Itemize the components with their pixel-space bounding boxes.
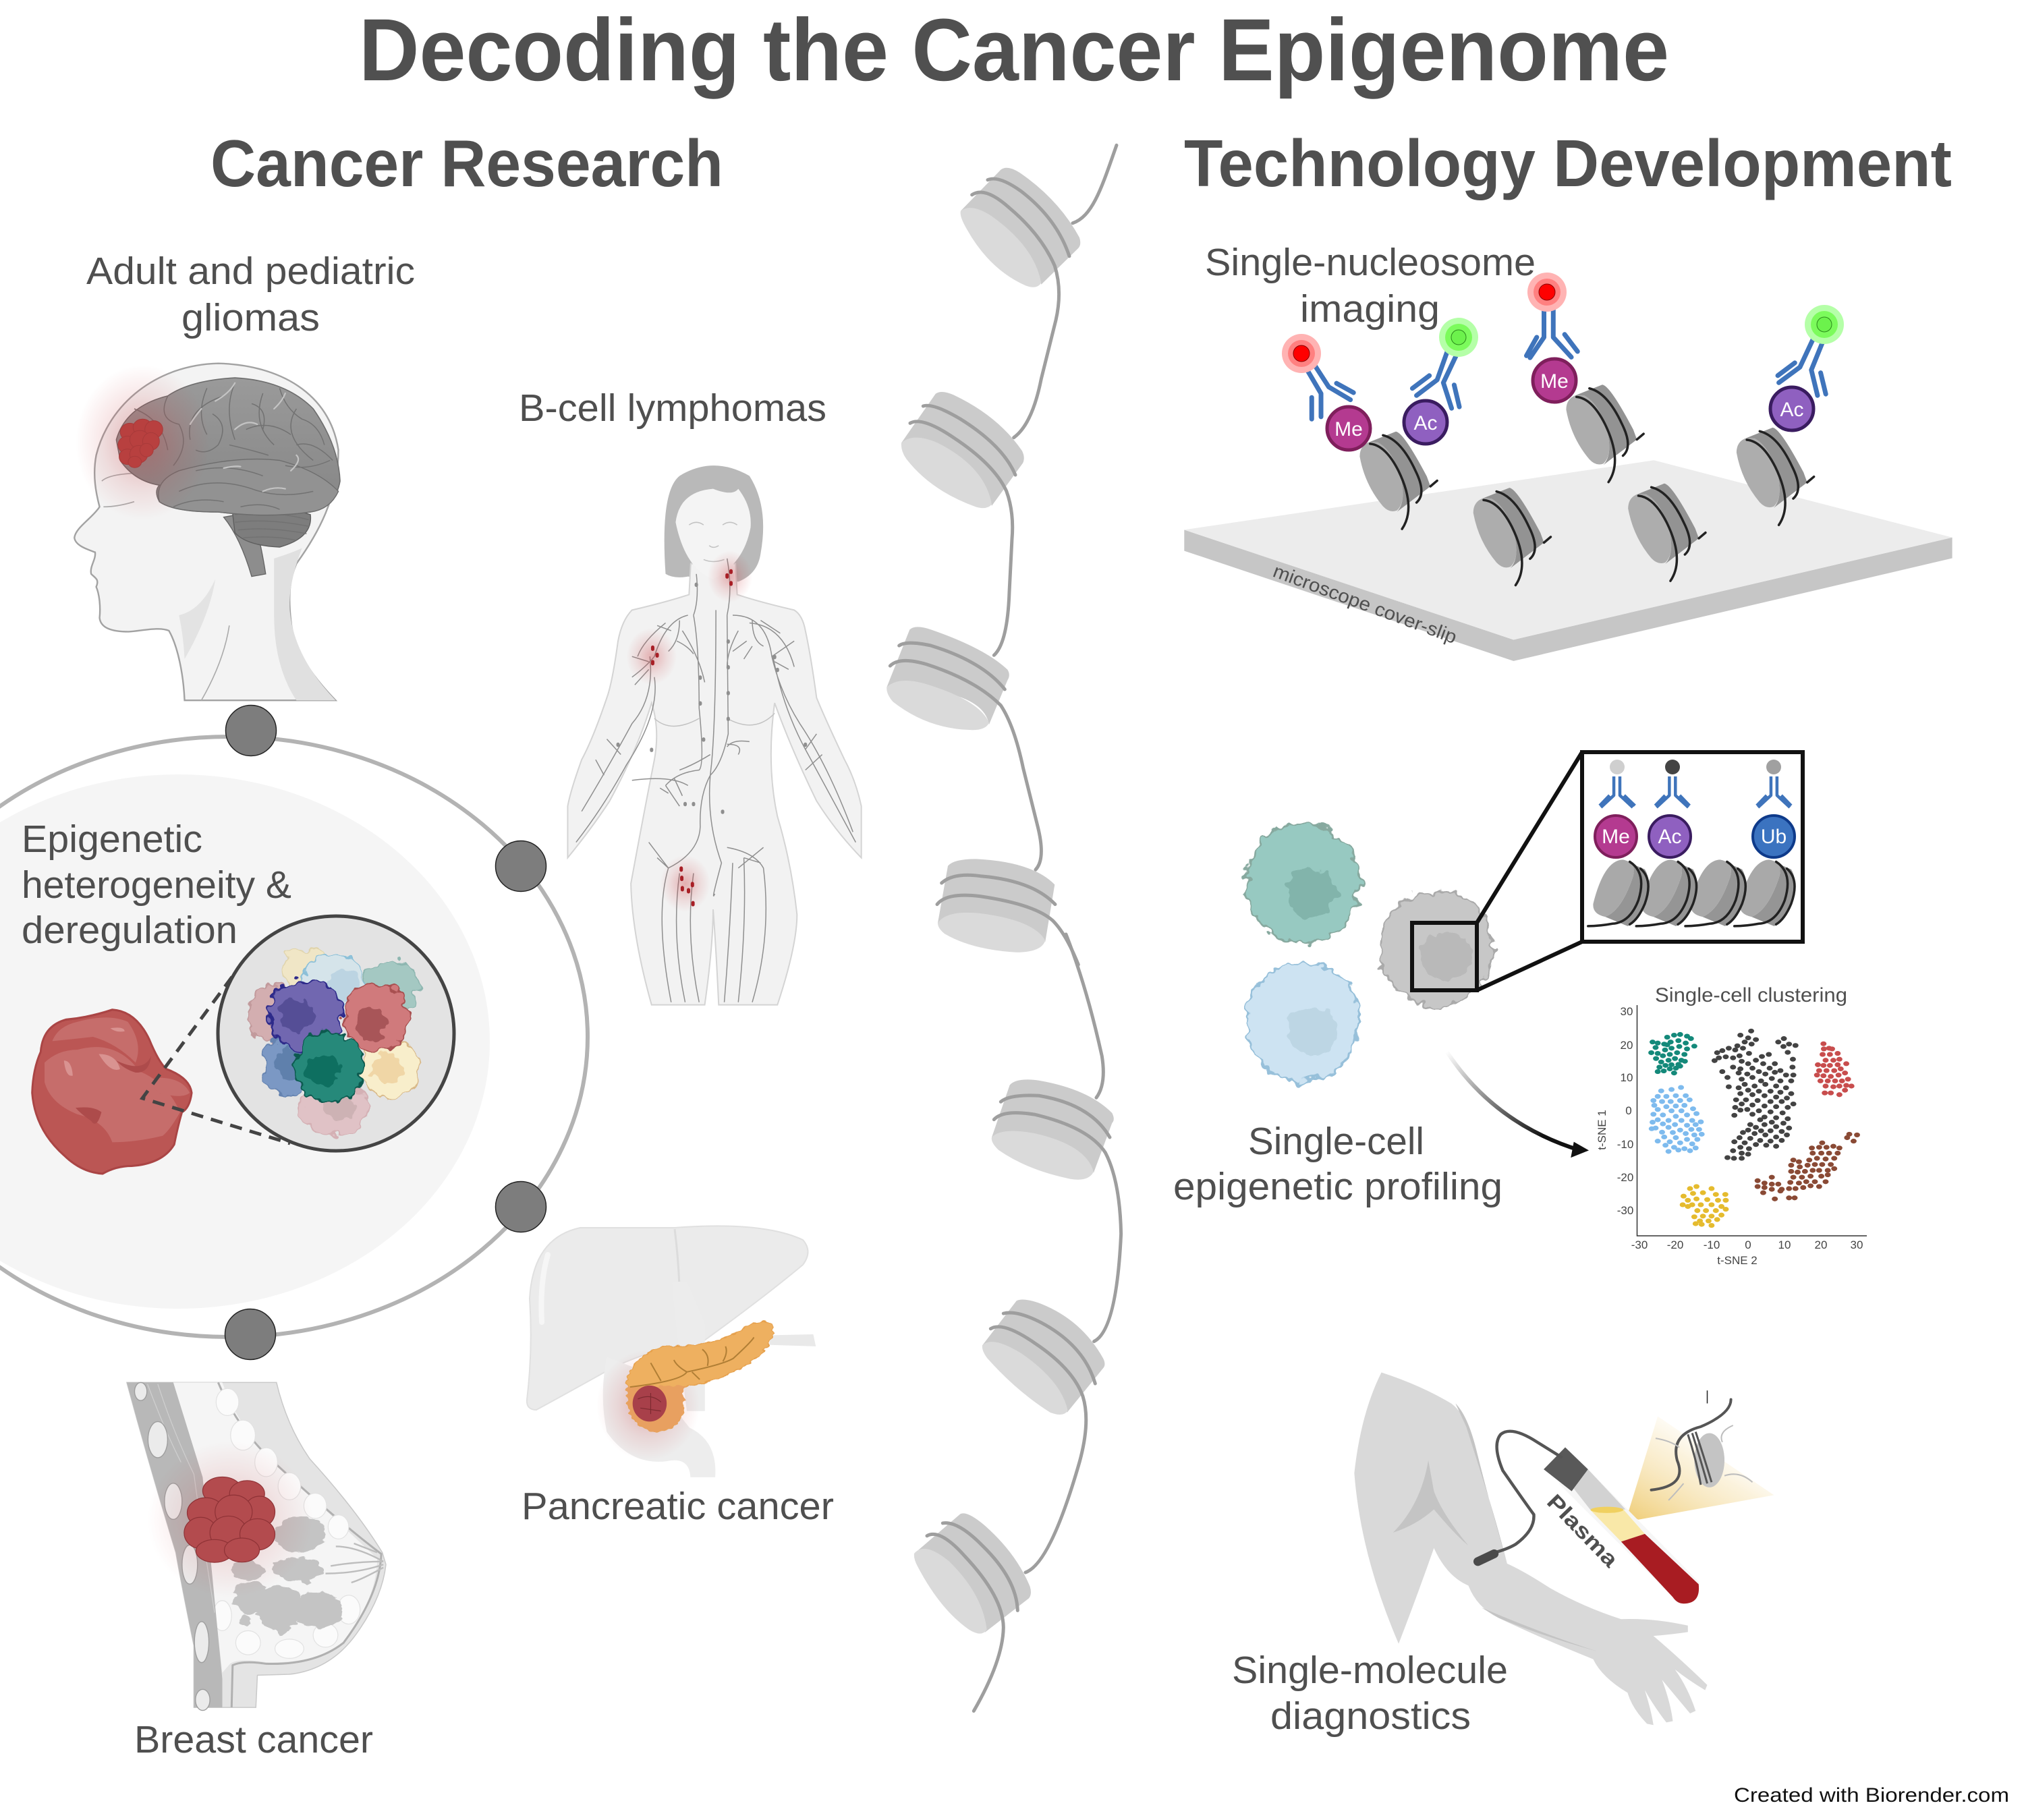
label: epigenetic heterogeneity: heterogeneity & xyxy=(22,863,291,907)
illustration: liver xyxy=(527,1226,808,1410)
axis ticks xyxy=(1617,1005,1863,1251)
label: single-nucleosome imaging: Single-nucleosome xyxy=(1205,241,1536,284)
arrow to clustering plot xyxy=(1447,1052,1589,1158)
inset: barcoded antibodies on nucleosomes: Ub xyxy=(1761,826,1787,848)
axis ticks: -10 xyxy=(1704,1239,1720,1251)
tumor glows xyxy=(626,550,752,912)
fluorophores xyxy=(1282,273,1844,373)
axis ticks: -30 xyxy=(1631,1239,1648,1251)
tumor xyxy=(118,419,163,467)
panel: adult and pediatric gliomas xyxy=(74,250,415,700)
illustration: pancreas and duodenum xyxy=(596,1282,816,1477)
mini nucleosome xyxy=(1652,1390,1753,1500)
chromatin fiber: upper nucleosomes xyxy=(887,145,1117,965)
cap xyxy=(1544,1448,1588,1491)
inset: barcoded antibodies on nucleosomes: Ac xyxy=(1658,826,1682,848)
nucleosome 5 xyxy=(992,1079,1121,1342)
nucleosome 7 xyxy=(914,1513,1031,1711)
label: single-molecule diagnostics: diagnostics xyxy=(1270,1695,1471,1738)
illustration: arm with blood draw tube xyxy=(1354,1372,1774,1725)
label: epigenetic heterogeneity: deregulation xyxy=(22,909,237,952)
nucleosome 6 xyxy=(982,1299,1104,1572)
label: gliomas xyxy=(86,250,415,339)
label: gliomas: Adult and pediatric xyxy=(86,250,415,293)
blood xyxy=(1621,1534,1699,1603)
axis ticks: 20 xyxy=(1621,1039,1633,1052)
brain xyxy=(116,378,340,515)
axis ticks: 30 xyxy=(1851,1239,1863,1251)
connector dots xyxy=(225,706,546,1360)
label: cover-slip: microscope cover-slip xyxy=(1270,561,1460,648)
label: single-molecule diagnostics xyxy=(1232,1649,1508,1738)
histone marks: Ac xyxy=(1780,399,1804,421)
inner background xyxy=(0,774,490,1309)
panel: epigenetic heterogeneity orbit xyxy=(0,706,588,1360)
inset: barcoded antibodies on nucleosomes: Me xyxy=(1602,826,1630,848)
label: single-cell profiling: epigenetic profiling xyxy=(1173,1165,1502,1208)
icon: tumor mass xyxy=(32,1010,192,1174)
axis titles: t-SNE 2 xyxy=(1717,1254,1758,1267)
chart title: Single-cell clustering xyxy=(1655,984,1847,1006)
scatter clusters xyxy=(1652,1031,1857,1226)
illustration: head with brain tumor xyxy=(74,364,340,700)
microscope cover-slip with nucleosomes and antibodies xyxy=(1184,305,1952,661)
dashed zoom lines xyxy=(142,977,290,1143)
tumor xyxy=(184,1477,275,1562)
label: single-nucleosome imaging xyxy=(1205,241,1536,331)
glow xyxy=(76,365,210,519)
orbit ring xyxy=(0,737,588,1337)
panel: breast cancer xyxy=(127,1382,386,1761)
label: single-nucleosome imaging: imaging xyxy=(1300,287,1440,331)
axis titles: t-SNE 1 xyxy=(1596,1110,1608,1150)
nucleosome 1 xyxy=(961,168,1080,438)
tube glass xyxy=(1558,1469,1699,1603)
nucleosome 4 xyxy=(937,859,1078,965)
axis titles xyxy=(1596,1110,1758,1267)
label: epigenetic heterogeneity xyxy=(22,818,291,952)
axis ticks: -20 xyxy=(1617,1171,1633,1184)
panel: b-cell lymphomas xyxy=(519,387,862,1005)
nucleosome 2 xyxy=(901,392,1024,655)
axis ticks: 0 xyxy=(1625,1104,1632,1117)
label: pancreatic cancer: Pancreatic cancer xyxy=(522,1485,834,1528)
affected lymph nodes xyxy=(652,571,731,905)
brainstem and cerebellum xyxy=(224,512,266,577)
arm xyxy=(1354,1372,1708,1725)
heading: technology development: Technology Development xyxy=(1184,126,1952,200)
axes xyxy=(1637,1005,1867,1236)
axis ticks: -10 xyxy=(1617,1138,1633,1151)
nucleosome 3 xyxy=(887,627,1041,870)
axis ticks: -20 xyxy=(1667,1239,1683,1251)
axis ticks: 0 xyxy=(1745,1239,1751,1251)
title: Decoding the Cancer Epigenome xyxy=(359,0,1669,99)
panel: single-cell epigenetic profiling xyxy=(1173,752,1867,1267)
inset: barcoded antibodies on nucleosomes xyxy=(1582,752,1803,942)
panel: single-nucleosome imaging xyxy=(1184,241,1952,661)
cells xyxy=(1246,824,1493,1081)
label: breast cancer: Breast cancer xyxy=(134,1718,373,1761)
axis ticks: -30 xyxy=(1617,1204,1633,1217)
zoom box and lines xyxy=(1412,752,1582,990)
label: single-cell profiling: Single-cell xyxy=(1248,1120,1424,1163)
chromatin fiber: lower nucleosomes xyxy=(914,934,1121,1711)
axis ticks: 30 xyxy=(1621,1005,1633,1018)
tubing xyxy=(1492,1431,1563,1554)
light beam xyxy=(1627,1417,1774,1520)
histone marks: Me xyxy=(1540,370,1569,393)
label: lymphomas: B-cell lymphomas xyxy=(519,387,826,430)
label: single-molecule diagnostics: Single-molecule xyxy=(1232,1649,1508,1692)
attribution: Created with Biorender.com xyxy=(1734,1784,2009,1807)
panel: single-molecule diagnostics xyxy=(1232,1372,1774,1738)
label: gliomas: gliomas xyxy=(181,296,320,339)
illustration: body with lymphatic system xyxy=(567,465,862,1005)
panel: pancreatic cancer xyxy=(522,1226,834,1528)
label: epigenetic heterogeneity: Epigenetic xyxy=(22,818,202,861)
illustration: breast cross-section xyxy=(127,1382,386,1711)
plasma xyxy=(1591,1507,1645,1541)
heading: cancer research: Cancer Research xyxy=(210,126,723,200)
axis ticks: 20 xyxy=(1815,1239,1827,1251)
axis ticks: 10 xyxy=(1621,1071,1633,1084)
label: single-cell profiling xyxy=(1173,1120,1502,1208)
histone marks xyxy=(1327,359,1814,450)
label: plasma: Plasma xyxy=(1542,1489,1623,1572)
histone marks: Me xyxy=(1334,418,1363,440)
histone marks: Ac xyxy=(1413,412,1438,434)
axis ticks: 10 xyxy=(1778,1239,1791,1251)
chart: single-cell clustering t-SNE xyxy=(1596,984,1867,1267)
magnifier: heterogeneous tumor cells xyxy=(218,916,454,1151)
